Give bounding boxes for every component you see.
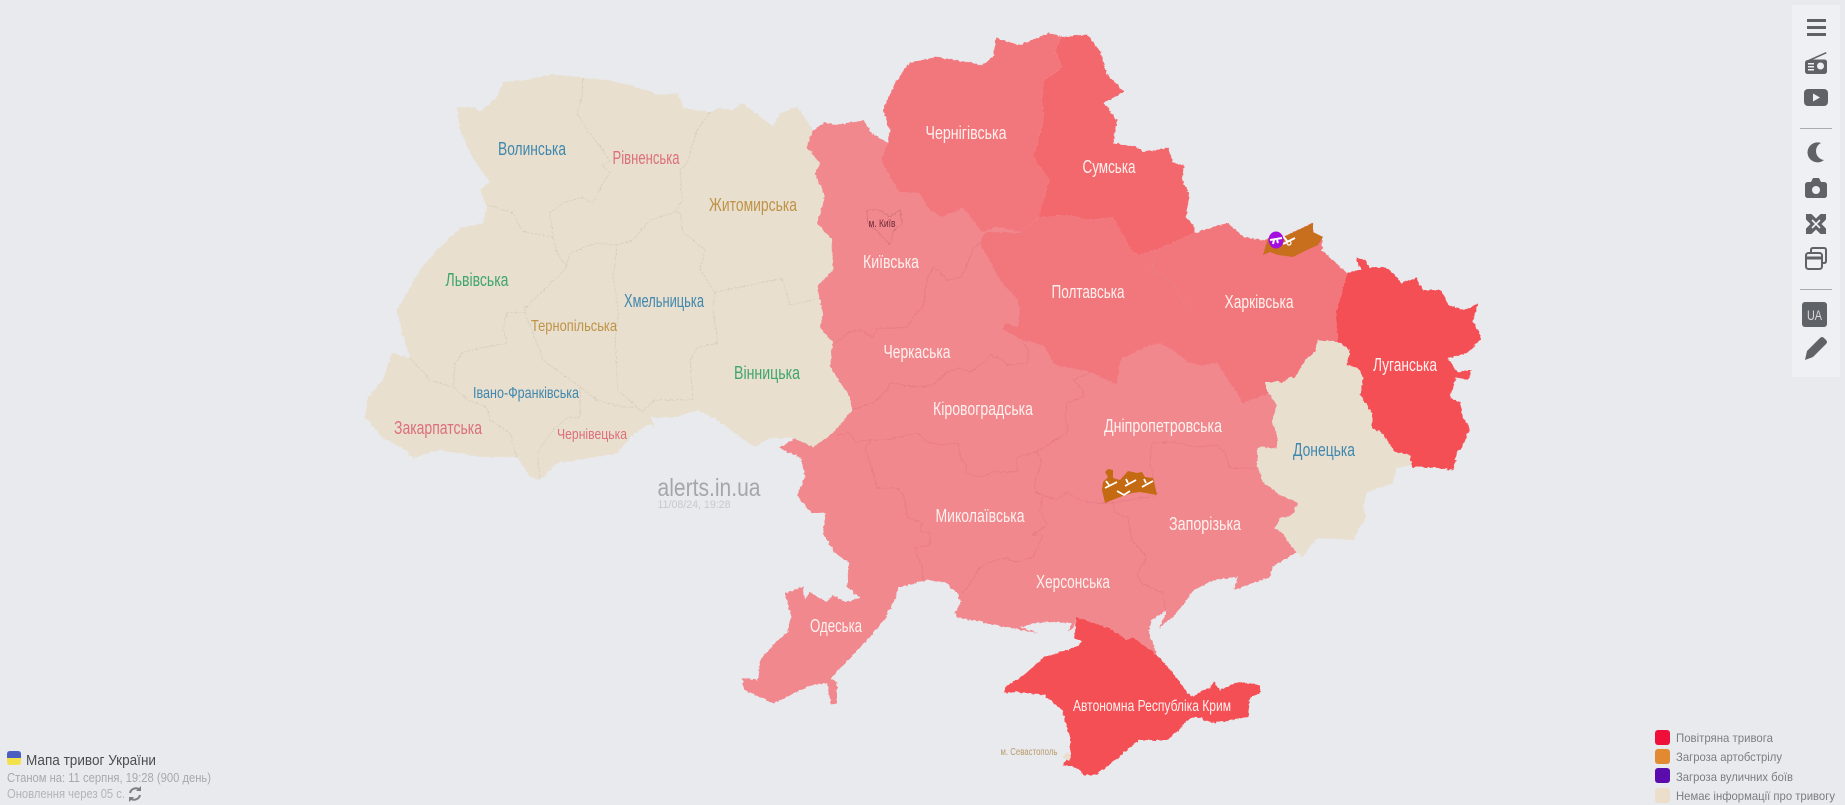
map: Sumy oblast [1033, 35, 1195, 255]
label: Lviv: Львівська [446, 270, 509, 290]
icon: radio [1805, 52, 1827, 74]
legend: no info text: Немає інформації про тривогу [1676, 789, 1835, 803]
label: Poltava: Полтавська [1052, 282, 1125, 302]
label: Volyn: Волинська [498, 139, 567, 159]
icon: menu [1807, 19, 1826, 36]
map: western oblasts without alert [365, 74, 852, 480]
legend [1655, 730, 1835, 803]
label: Sevastopol: м. Севастополь [1000, 747, 1058, 758]
label: Kirovohrad: Кіровоградська [933, 399, 1034, 419]
label: Cherkasy: Черкаська [884, 342, 951, 362]
status date: Станом на: 11 серпня, 19:28 (900 день) [7, 770, 211, 785]
map: Luhansk oblast [1336, 258, 1482, 470]
refresh countdown: Оновлення через 05 с. [7, 786, 125, 801]
label: Zhytomyr: Житомирська [709, 195, 798, 215]
map: Sevastopol city [1062, 752, 1071, 761]
icon: windows [1806, 248, 1826, 269]
icon: Ukrainian flag [7, 751, 21, 765]
legend: air alert swatch [1655, 730, 1670, 745]
label: Zaporizhzhia: Запорізька [1169, 514, 1242, 534]
toolbar divider [1800, 289, 1832, 290]
legend: artillery text: Загроза артобстрілу [1676, 750, 1782, 764]
label: Odesa: Одеська [810, 616, 863, 636]
icon: expand [1806, 214, 1826, 234]
legend: street fighting swatch [1655, 768, 1670, 783]
watermark: alerts.in.ua: alerts.in.ua [658, 474, 761, 502]
title: Мапа тривог України [26, 752, 156, 769]
label: Zakarpattia: Закарпатська [394, 418, 483, 438]
map: Chernihiv, Poltava and Kharkiv oblasts [881, 33, 1347, 403]
label: Ternopil: Тернопільська [531, 318, 617, 335]
label: Kyiv city: м. Київ [868, 218, 896, 230]
legend: air alert text: Повітряна тривога [1676, 731, 1773, 745]
label: Khmelnytskyi: Хмельницька [624, 291, 705, 311]
info block: bottom left [7, 751, 211, 802]
label: Chernihiv: Чернігівська [926, 123, 1007, 143]
icon: camera [1805, 178, 1827, 198]
label: Crimea: Автономна Республіка Крим [1073, 698, 1231, 715]
label: Donetsk: Донецька [1293, 440, 1356, 460]
label: Kyiv oblast: Київська [863, 252, 920, 272]
label: Kharkiv: Харківська [1224, 292, 1294, 312]
icon: moon [1808, 142, 1824, 162]
toolbar panel [1792, 5, 1840, 377]
label: Ivano-Frankivsk: Івано-Франківська [473, 385, 579, 402]
artillery threat zone: Kharkiv north [1263, 223, 1323, 257]
label: Sumy: Сумська [1082, 157, 1136, 177]
label: Mykolaiv: Миколаївська [936, 506, 1025, 526]
watermark timestamp: 11/08/24, 19:28 [658, 499, 730, 511]
artillery threat zone: Dnipro south [1102, 469, 1157, 503]
legend: street fighting text: Загроза вуличних боїв [1676, 770, 1793, 784]
icon: language button: UA [1807, 307, 1823, 323]
label: Vinnytsia: Вінницька [734, 363, 801, 383]
map: Donetsk oblast without alert [1257, 340, 1411, 557]
icon: video [1804, 89, 1828, 106]
icon: refresh [129, 786, 141, 802]
map: central and southern oblasts under air alert [742, 120, 1298, 705]
label: Dnipropetrovsk: Дніпропетровська [1104, 416, 1223, 436]
label: Chernivtsi: Чернівецька [557, 426, 628, 443]
street fighting marker: Kharkiv north [1268, 232, 1284, 248]
icon: language button [1802, 302, 1827, 327]
legend: artillery swatch [1655, 749, 1670, 764]
toolbar divider [1800, 128, 1832, 129]
label: Kherson: Херсонська [1036, 572, 1111, 592]
legend: no info swatch [1655, 788, 1670, 803]
icon: pencil [1805, 337, 1827, 360]
map: Crimea [1005, 617, 1260, 775]
label: Rivne: Рівненська [612, 148, 680, 168]
label: Luhansk: Луганська [1373, 355, 1438, 375]
map: Kyiv city [867, 210, 902, 245]
